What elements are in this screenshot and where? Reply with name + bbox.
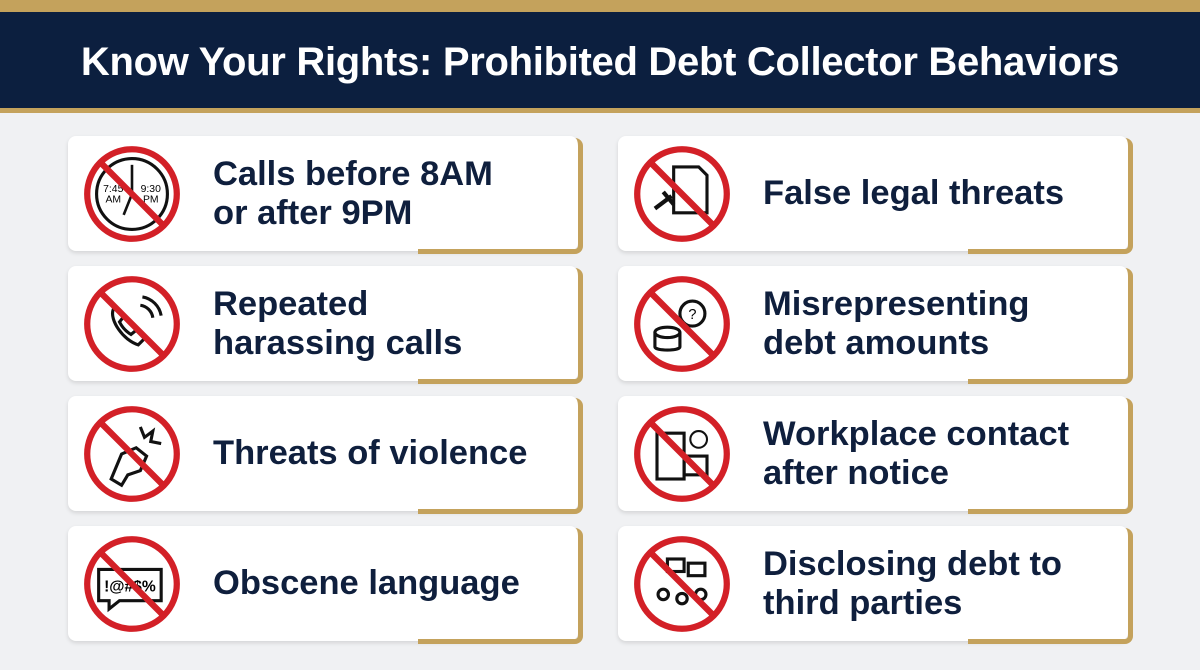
- text: Disclosing debt to: [763, 544, 1062, 582]
- text: Threats of violence: [213, 434, 527, 472]
- icon: building: [634, 406, 730, 502]
- text: harassing calls: [213, 324, 462, 362]
- text: [763, 284, 1029, 362]
- text: [763, 544, 1062, 622]
- card: violence: [68, 396, 578, 511]
- text: False legal threats: [763, 174, 1064, 212]
- icon: clock: 7:45: [103, 184, 124, 195]
- card: obscene: [68, 526, 578, 641]
- text: Repeated: [213, 284, 368, 322]
- text: Workplace contact: [763, 414, 1069, 452]
- card: workplace: [618, 396, 1128, 511]
- icon: fist: [84, 406, 180, 502]
- icon: people: [634, 536, 730, 632]
- icon: speech bubble: [84, 536, 180, 632]
- icon: clock: PM: [143, 194, 159, 205]
- text: after notice: [763, 454, 949, 492]
- text: Obscene language: [213, 564, 520, 602]
- text: third parties: [763, 584, 962, 622]
- text: Misrepresenting: [763, 284, 1029, 322]
- title: Know Your Rights: Prohibited Debt Collector Behaviors: [81, 40, 1119, 84]
- text: or after 9PM: [213, 194, 412, 232]
- text: [213, 284, 462, 362]
- text: debt amounts: [763, 324, 989, 362]
- icon: clock: 9:30: [141, 184, 161, 195]
- card: disclosing: [618, 526, 1128, 641]
- text: [213, 154, 493, 232]
- card: false legal threats: [618, 136, 1128, 251]
- icon: clock: AM: [105, 194, 121, 205]
- icon: clock: [84, 146, 180, 242]
- card: repeated calls: [68, 266, 578, 381]
- icon: coins and magnifier: [634, 276, 730, 372]
- card: calls before 8am: [68, 136, 578, 251]
- icon: gavel and document: [634, 146, 730, 242]
- text: Calls before 8AM: [213, 154, 493, 192]
- icon: speech bubble: !@#$%: [104, 578, 156, 595]
- text: [763, 414, 1069, 492]
- card: misrepresenting: [618, 266, 1128, 381]
- icon: phone: [84, 276, 180, 372]
- title: [0, 12, 1200, 113]
- icon: coins and magnifier: ?: [688, 307, 696, 323]
